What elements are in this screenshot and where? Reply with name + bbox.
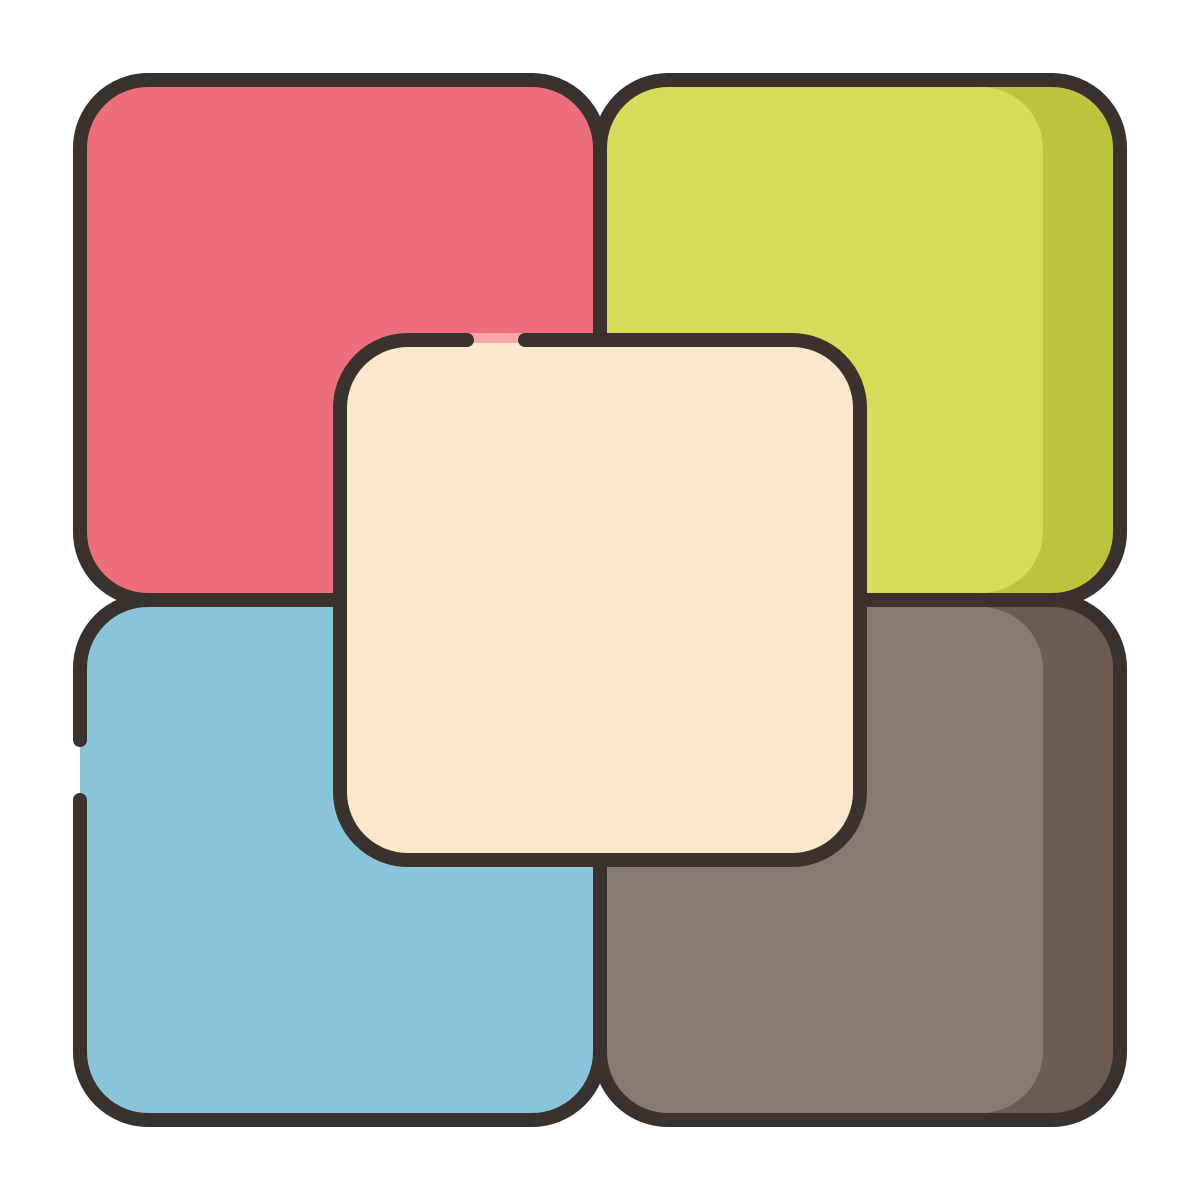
icon: four rounded tiles with center tile xyxy=(73,73,1127,1127)
tile: blue bottom-left xyxy=(80,600,600,1120)
tile: red top-left xyxy=(80,80,600,600)
tile: green top-right xyxy=(600,73,1127,600)
tile: brown bottom-right xyxy=(600,600,1127,1127)
tile: cream center xyxy=(340,333,860,860)
